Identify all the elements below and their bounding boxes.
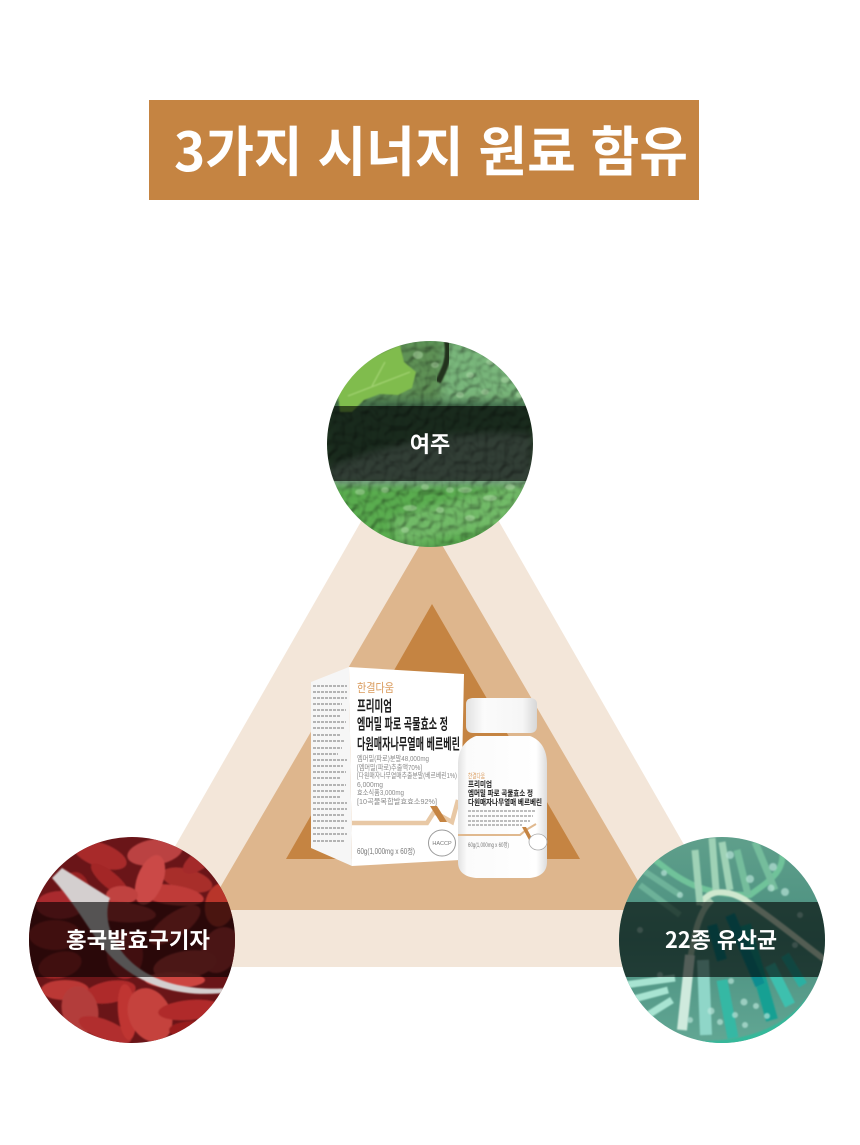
title text: 3가지 시너지 원료 함유 bbox=[174, 108, 688, 187]
label: 여주: 여주 bbox=[410, 432, 450, 457]
DNA helix strands bbox=[625, 838, 825, 1043]
outer triangle bbox=[106, 401, 754, 967]
box ingredient list: 엠머밀(파로)분말48,000mg bbox=[357, 754, 429, 763]
bottle label: 60g(1,000mg x 60정) bbox=[468, 842, 509, 849]
melon highlights bbox=[355, 351, 524, 533]
layered triangle diagram bbox=[106, 401, 754, 967]
box front panel bbox=[349, 667, 464, 866]
box product name bbox=[357, 698, 460, 753]
bottle cap bbox=[466, 698, 537, 733]
bottle label: 엠머밀 파로 곡물효소 정 bbox=[468, 788, 533, 798]
crease bbox=[438, 341, 448, 382]
HACCP badge bbox=[428, 830, 456, 856]
box ingredient list: 효소식품3,000mg bbox=[357, 788, 404, 797]
ingredient circle: red goji berries bbox=[29, 834, 246, 1050]
inner triangle bbox=[286, 604, 580, 859]
box ingredient list: 6,000mg bbox=[357, 780, 383, 789]
bottle label: 한결다움 bbox=[468, 771, 485, 780]
bottle label bbox=[458, 771, 547, 850]
HACCP badge: HACCP bbox=[432, 841, 452, 847]
label: 22종 유산균: 22종 유산균 bbox=[665, 923, 777, 955]
leaf bbox=[338, 345, 416, 412]
box product name: 프리미엄 bbox=[357, 698, 392, 715]
bottle body bbox=[458, 736, 547, 878]
spoon bbox=[52, 868, 232, 994]
product: box bbox=[311, 667, 464, 866]
product: bottle bbox=[458, 698, 547, 878]
bottle label: 다원매자나무열매 베르베린 bbox=[468, 797, 542, 807]
ingredient circle: bitter melon bbox=[327, 341, 533, 547]
box product name: 다원매자나무열매 베르베린 bbox=[357, 736, 460, 753]
dark band bbox=[29, 902, 235, 977]
box product name: 엠머밀 파로 곡물효소 정 bbox=[357, 716, 448, 733]
label: 홍국발효구기자: 홍국발효구기자 bbox=[66, 928, 210, 953]
box ingredient list: [엠머밀(파로)추출액70%] bbox=[357, 762, 422, 772]
title banner bbox=[149, 100, 699, 200]
box side panel bbox=[311, 667, 352, 866]
ingredient circle: 22 lactobacillus strains bbox=[619, 837, 825, 1043]
dark band bbox=[619, 902, 825, 977]
box ingredient list: [다원매자나무열매추출분말(베르베린1%) bbox=[357, 770, 457, 780]
brand name: 한결다움 bbox=[357, 681, 394, 695]
box ingredient list: [10곡물복합발효효소92%] bbox=[357, 797, 437, 806]
floating dots bbox=[637, 851, 803, 1028]
dark band bbox=[327, 406, 533, 481]
box graph motif bbox=[352, 800, 458, 823]
middle triangle bbox=[207, 526, 655, 910]
bottle label: 프리미엄 bbox=[468, 779, 492, 789]
box ingredient list bbox=[357, 754, 457, 806]
box weight: 60g(1,000mg x 60정) bbox=[357, 846, 415, 856]
